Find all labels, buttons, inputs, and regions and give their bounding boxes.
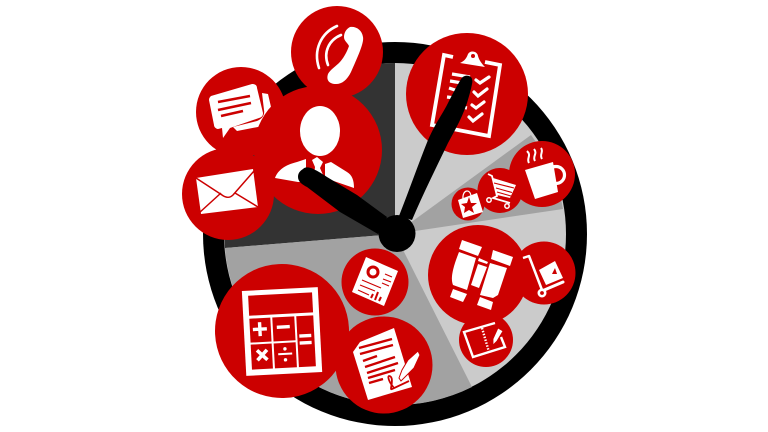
icon: calculator [212, 261, 352, 401]
icon: notebook with pen [459, 313, 513, 367]
icon: chat bubbles [196, 67, 286, 157]
icon: coffee mug [509, 141, 575, 207]
icon: contract with pen [336, 316, 432, 414]
icon: envelope [182, 148, 274, 240]
icon: hand truck [512, 242, 576, 304]
clock face sectors [224, 63, 566, 405]
icon: phone [291, 6, 383, 98]
hub [378, 215, 416, 252]
hour hand [298, 167, 387, 234]
clock hands [298, 76, 472, 252]
icon: shopping cart [478, 168, 522, 213]
icon: report [342, 248, 408, 316]
icon: clipboard checklist [406, 33, 528, 155]
icon: shopping bag with star [452, 188, 484, 220]
clock ring [203, 42, 587, 426]
icon: binoculars [428, 225, 528, 325]
icon: person [254, 86, 382, 214]
minute hand [399, 76, 472, 220]
